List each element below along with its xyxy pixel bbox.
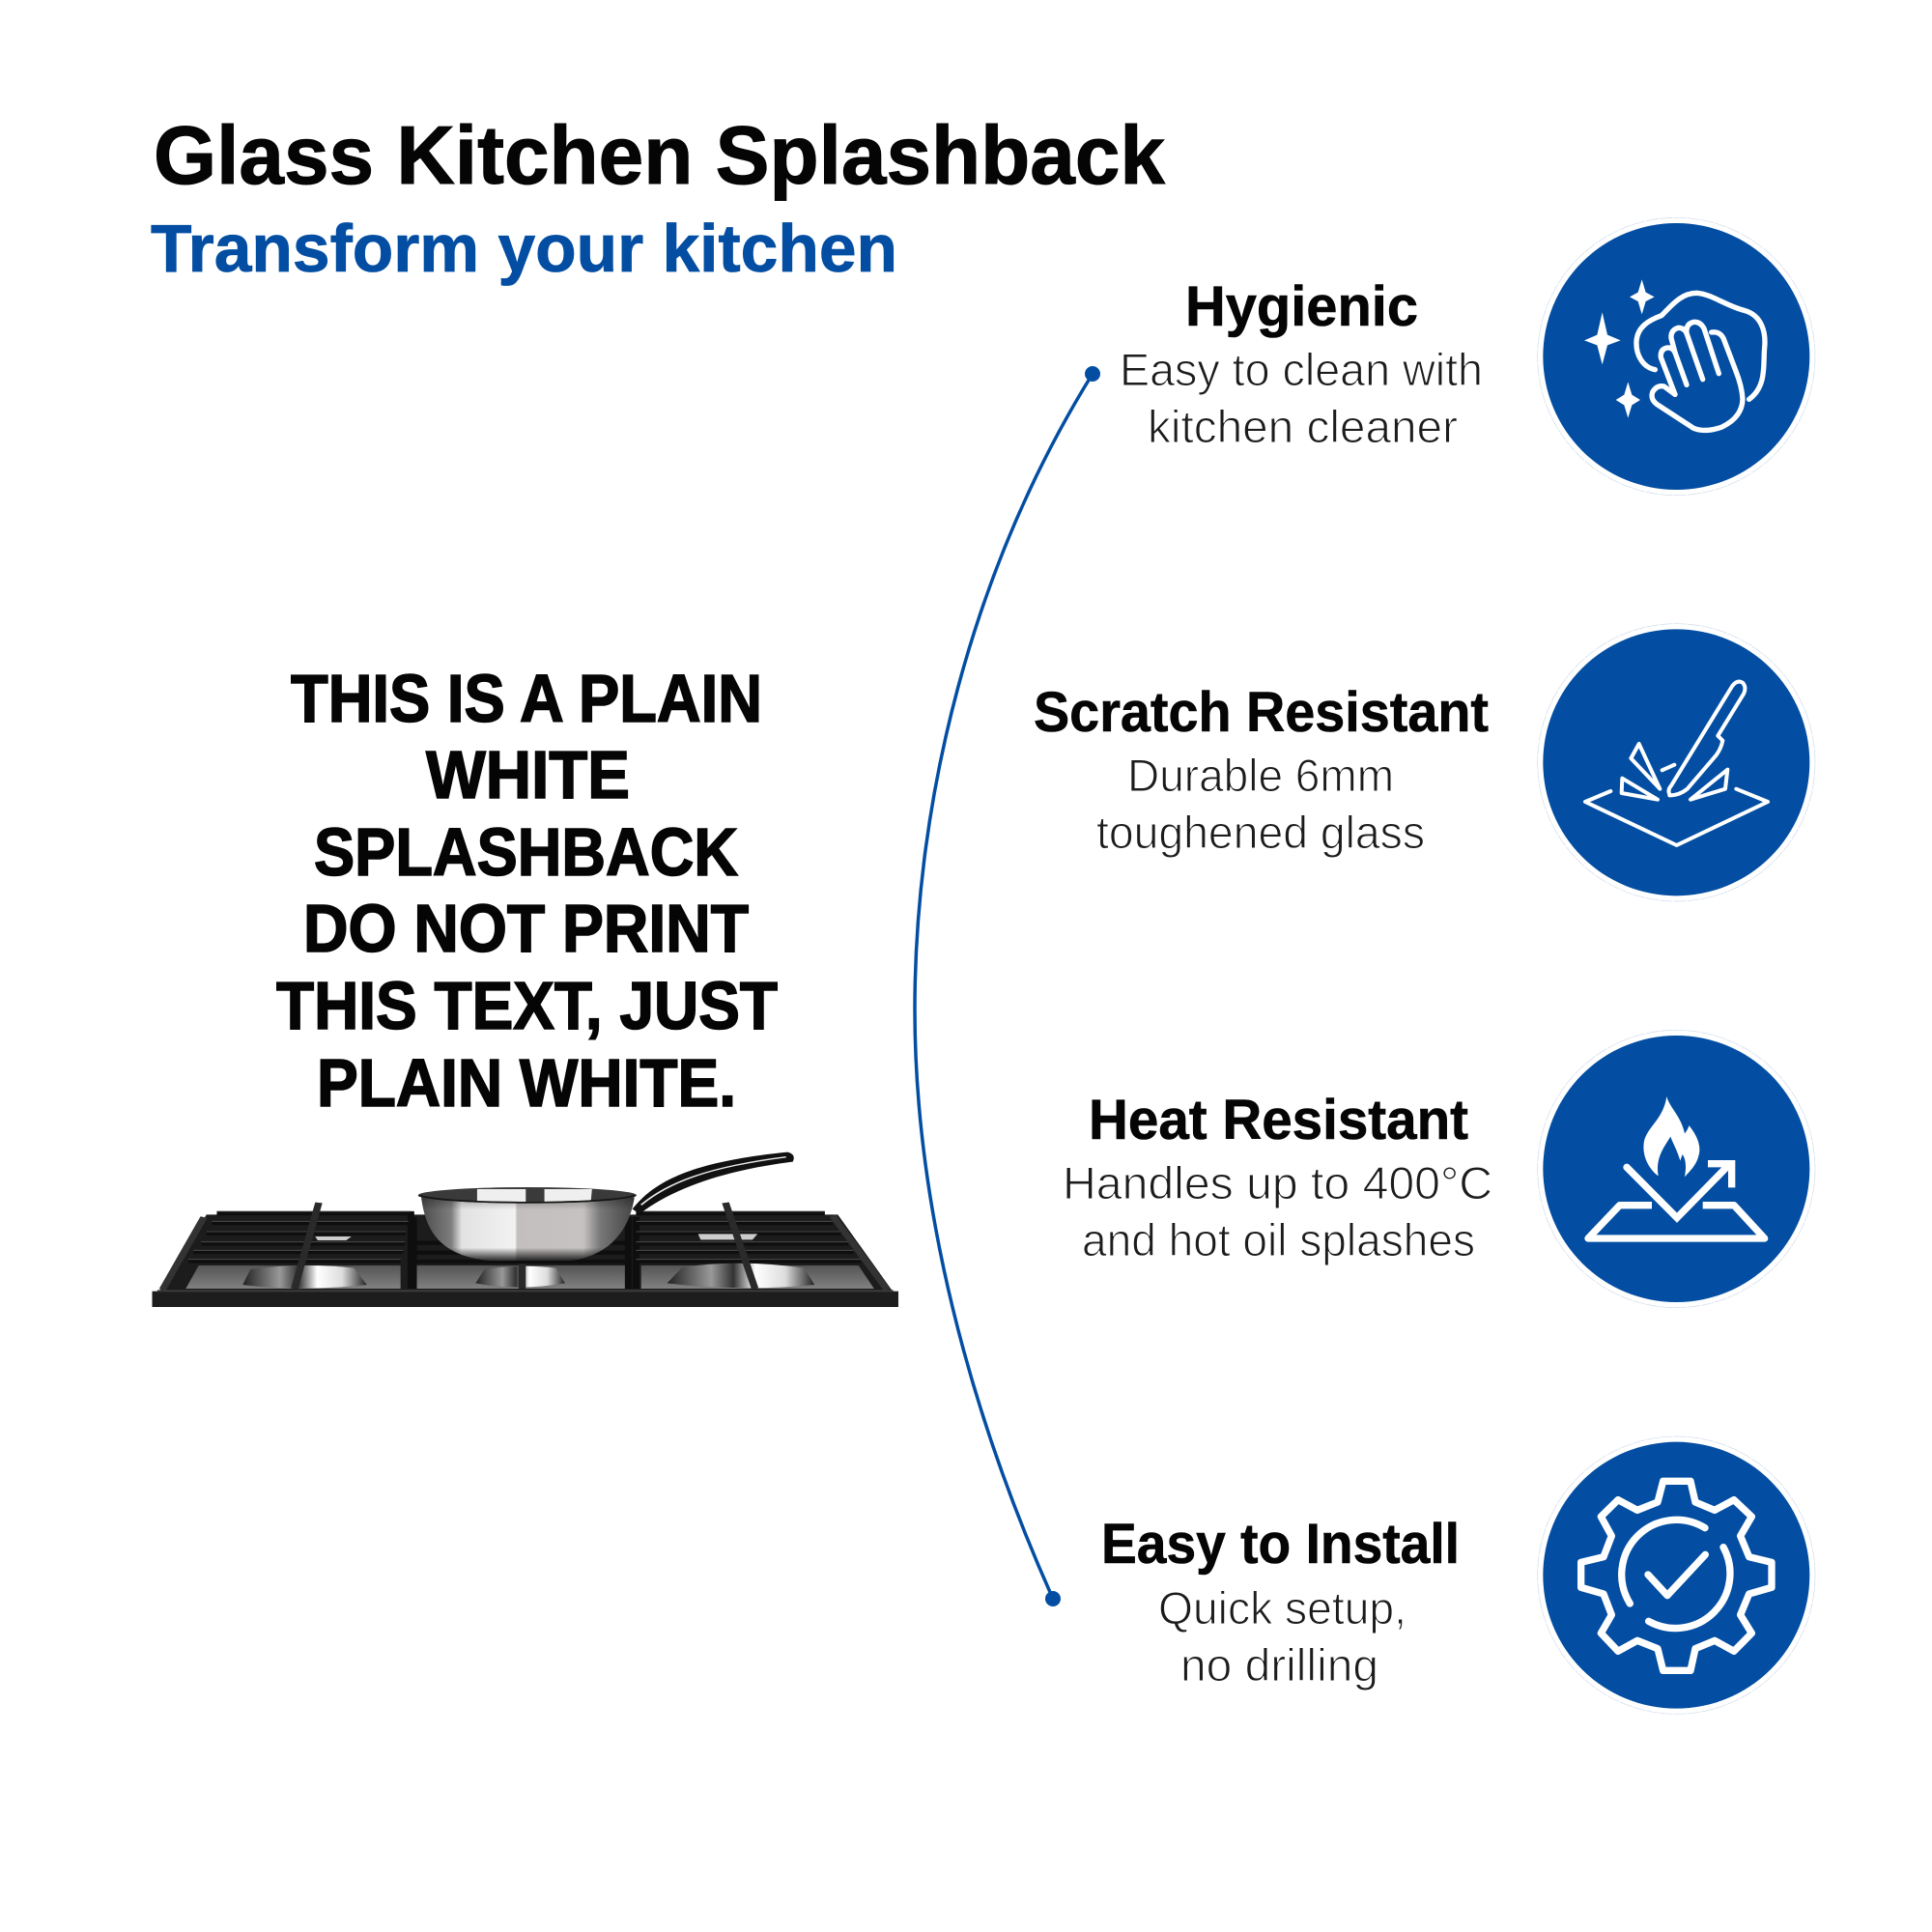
feature text: Easy to Install: Quick setup,: [1158, 1582, 1406, 1634]
notice text: plain white splashback: THIS IS A PLAIN: [291, 661, 762, 736]
notice text: plain white splashback: [276, 661, 778, 1121]
feature text: Heat Resistant: and hot oil splashes: [1082, 1214, 1475, 1265]
pan handle: [633, 1152, 794, 1214]
feature text: Scratch Resistant: toughened glass: [1096, 807, 1425, 858]
feature text: Heat Resistant: Heat Resistant: [1089, 1089, 1468, 1151]
feature text: Hygienic: Easy to clean with: [1120, 344, 1483, 395]
notice text: plain white splashback: PLAIN WHITE.: [317, 1045, 736, 1121]
feature text: Hygienic: [1120, 275, 1483, 452]
feature text: Easy to Install: no drilling: [1180, 1639, 1378, 1690]
feature text: Scratch Resistant: Scratch Resistant: [1034, 681, 1489, 744]
connecting arc: [915, 366, 1100, 1606]
feature text: Scratch Resistant: Durable 6mm: [1127, 750, 1394, 801]
notice text: plain white splashback: THIS TEXT, JUST: [276, 968, 778, 1043]
feature text: Scratch Resistant: [1034, 681, 1489, 858]
notice text: plain white splashback: SPLASHBACK: [314, 814, 738, 890]
icon: knife on glass: [1538, 624, 1815, 901]
illustration: gas hob with pan: [152, 1152, 898, 1307]
feature text: Heat Resistant: [1063, 1089, 1492, 1265]
icon: hand wiping with sparkles: [1538, 217, 1815, 496]
feature text: Easy to Install: Easy to Install: [1101, 1513, 1460, 1576]
notice text: plain white splashback: WHITE: [426, 737, 630, 812]
feature text: Hygienic: Hygienic: [1185, 275, 1418, 338]
icon: flame on surface: [1538, 1030, 1815, 1308]
subtitle: Transform your kitchen: [151, 211, 897, 286]
burners: [242, 1264, 814, 1289]
feature text: Easy to Install: [1101, 1513, 1460, 1690]
notice text: plain white splashback: DO NOT PRINT: [303, 891, 749, 966]
pan bowl: [418, 1187, 637, 1261]
feature text: Hygienic: kitchen cleaner: [1148, 401, 1458, 452]
feature text: Heat Resistant: Handles up to 400°C: [1063, 1157, 1492, 1208]
title: Glass Kitchen Splashback: [154, 110, 1166, 202]
icon: gear with check mark: [1538, 1436, 1815, 1714]
